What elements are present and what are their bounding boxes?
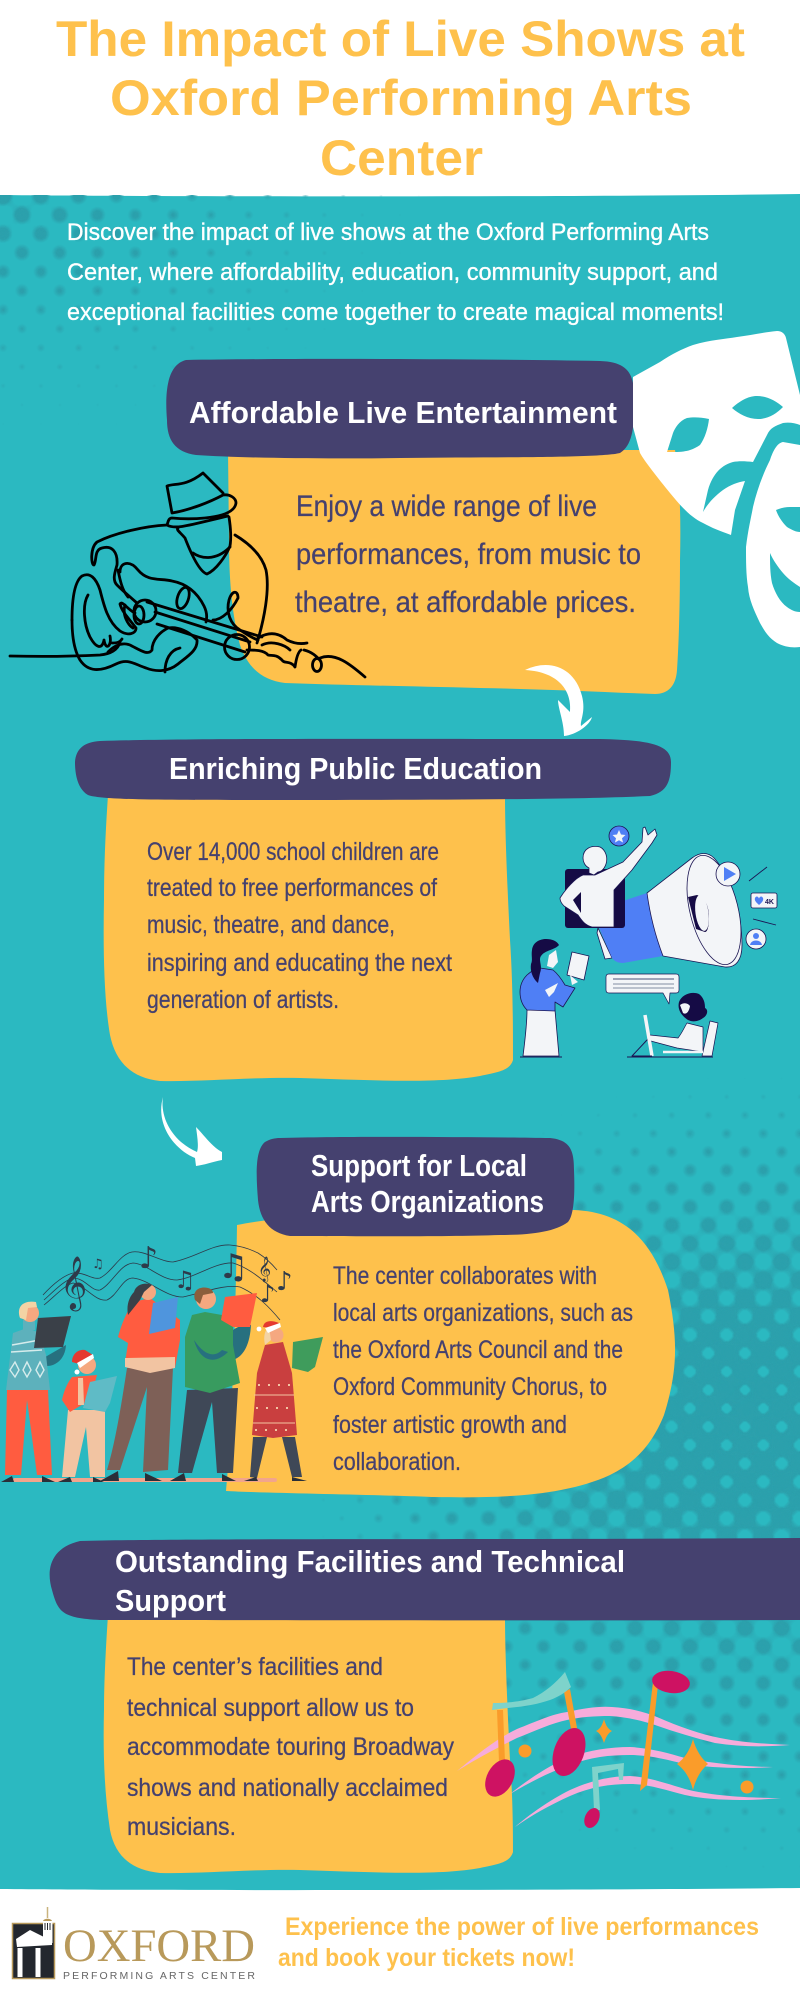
- right note: [640, 1682, 658, 1791]
- heading: Enriching Public Education: [169, 751, 542, 786]
- text block: treated to free performances of: [147, 874, 437, 902]
- presenter window: [565, 869, 625, 928]
- teal beam note: [492, 1672, 571, 1710]
- logo: Oxford Performing Arts Center: PERFORMING ARTS CENTER: [63, 1970, 255, 1982]
- intro text: Center, where affordability, education, community support, and: [67, 259, 718, 286]
- caroler 4: [170, 1288, 257, 1481]
- panel: affordable live entertainment: [166, 359, 680, 694]
- icon: theatre masks: [633, 331, 800, 647]
- heading: Arts Organizations: [311, 1184, 544, 1219]
- call to action: [278, 1913, 759, 1972]
- text block: accommodate touring Broadway: [127, 1733, 454, 1761]
- small teal note: [592, 1763, 624, 1810]
- clef and notes: ♫: [174, 1266, 196, 1294]
- caroler 1: [1, 1302, 71, 1482]
- text block: generation of artists.: [147, 986, 339, 1014]
- intro text: exceptional facilities come together to create magical moments!: [67, 299, 724, 326]
- text block: [295, 490, 641, 619]
- text block: technical support allow us to: [127, 1694, 414, 1722]
- heading: Support for Local: [311, 1148, 527, 1183]
- heading: [75, 739, 671, 800]
- text block: theatre, at affordable prices.: [295, 586, 636, 619]
- megaphone horn: [647, 854, 742, 967]
- clef and notes: ♫: [92, 1257, 104, 1272]
- panel background: [104, 1615, 513, 1873]
- panel: enriching public education: [75, 739, 671, 1081]
- icon: megaphone illustration: [520, 826, 777, 1057]
- heading: [50, 1538, 800, 1620]
- panel background: [104, 795, 513, 1081]
- text block: musicians.: [127, 1813, 236, 1841]
- text block: Over 14,000 school children are: [147, 838, 439, 866]
- woman with paper: [523, 1010, 559, 1056]
- text block: inspiring and educating the next: [147, 949, 452, 977]
- mask: upper: [633, 331, 800, 535]
- text block: Oxford Community Chorus, to: [333, 1373, 607, 1401]
- heading: [166, 359, 634, 458]
- magenta note heads: [479, 1754, 521, 1802]
- title: The Impact of Live Shows at: [56, 11, 745, 67]
- clef and notes: [60, 1241, 293, 1311]
- orange stems: [497, 1689, 577, 1762]
- footer: [12, 1907, 759, 1982]
- heading: Affordable Live Entertainment: [189, 395, 617, 430]
- logo: Oxford Performing Arts Center: OXFORD: [63, 1920, 255, 1972]
- text block: [147, 838, 452, 1014]
- text block: The center’s facilities and: [127, 1653, 383, 1681]
- ground: [13, 1478, 277, 1482]
- user badge: [746, 929, 766, 949]
- mask: lower: [746, 442, 800, 647]
- text block: [127, 1653, 454, 1841]
- text block: foster artistic growth and: [333, 1411, 567, 1439]
- clef and notes: 𝄞: [60, 1255, 87, 1311]
- text block: the Oxford Arts Council and the: [333, 1336, 623, 1364]
- heading: Outstanding Facilities and Technical: [115, 1544, 625, 1579]
- orange sparkles: [596, 1719, 612, 1743]
- play badge: [716, 862, 740, 886]
- text block: Enjoy a wide range of live: [296, 490, 597, 523]
- logo: Oxford Performing Arts Center: [12, 1907, 255, 1982]
- logo building: [12, 1907, 54, 1978]
- icon: carolers with music notes: [1, 1241, 323, 1482]
- icon: guitarist line drawing: [10, 473, 365, 677]
- caroler 5: [244, 1321, 323, 1481]
- woman at laptop: [702, 1021, 718, 1056]
- clef and notes: ♪: [139, 1241, 158, 1276]
- speech bubble: [606, 974, 679, 1004]
- panel: support for local arts organizations: [226, 1137, 675, 1497]
- 4K badge: [751, 893, 777, 908]
- text block: shows and nationally acclaimed: [127, 1774, 448, 1802]
- panel background: [226, 1210, 675, 1497]
- panel background: [228, 450, 680, 694]
- heading: [257, 1137, 574, 1236]
- clef and notes: ♪: [260, 1280, 275, 1308]
- title: [56, 11, 745, 186]
- presenter: [560, 827, 657, 927]
- call to action: and book your tickets now!: [278, 1944, 575, 1972]
- icon: music notes on waves: [457, 1668, 790, 1830]
- call to action: Experience the power of live performances: [285, 1913, 759, 1941]
- caroler 2 child: [58, 1350, 117, 1482]
- text block: collaboration.: [333, 1448, 461, 1476]
- clef and notes: 𝄞: [258, 1256, 271, 1282]
- text block: music, theatre, and dance,: [147, 911, 395, 939]
- intro text: Discover the impact of live shows at the Oxford Performing Arts: [67, 219, 709, 246]
- panel: outstanding facilities and technical support: [50, 1538, 800, 1873]
- star badge: [609, 826, 629, 846]
- text block: performances, from music to: [296, 538, 641, 571]
- text block: local arts organizations, such as: [333, 1299, 633, 1327]
- music staff: [43, 1245, 280, 1320]
- arrow: to local arts support: [161, 1097, 222, 1166]
- arrow: to public education: [525, 665, 592, 736]
- title: Center: [320, 130, 483, 186]
- megaphone handle: [597, 928, 612, 959]
- heading: Support: [115, 1583, 226, 1618]
- pink waves: [457, 1707, 790, 1827]
- text block: The center collaborates with: [333, 1262, 597, 1290]
- intro text: [67, 219, 724, 326]
- icon: megaphone illustration: 4K: [765, 899, 774, 906]
- clef and notes: ♫: [218, 1247, 248, 1287]
- megaphone blue body: [598, 893, 663, 963]
- clef and notes: ♪: [276, 1267, 293, 1297]
- title: Oxford Performing Arts: [110, 70, 692, 126]
- caroler 3: [100, 1284, 180, 1481]
- text block: [333, 1262, 633, 1476]
